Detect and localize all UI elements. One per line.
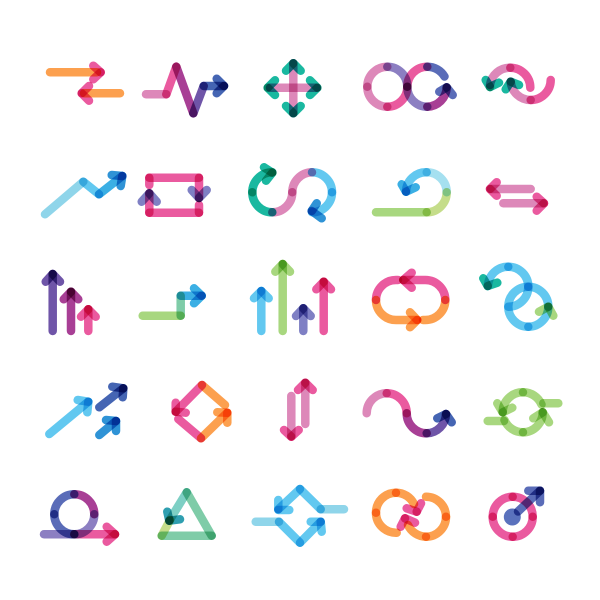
icon: swap arrows orange bbox=[50, 66, 120, 101]
icon: target arrow bbox=[493, 491, 540, 537]
icon: infinity loop arrow bbox=[367, 67, 453, 107]
icon: green sync arrows bbox=[488, 392, 558, 432]
icon: loop arrow bbox=[44, 494, 115, 542]
icon: triangle arrow bbox=[162, 492, 212, 536]
icon: pink swap arrows bbox=[490, 182, 544, 211]
icon: diamond split arrows bbox=[256, 489, 344, 543]
icon: diamond cycle arrows bbox=[176, 385, 227, 438]
icon: stadium cycle arrows bbox=[376, 273, 445, 327]
icon: three diagonal arrows bbox=[49, 387, 123, 435]
icon: pulse arrow bbox=[146, 67, 224, 113]
icon: interlocked wave arrows bbox=[486, 68, 551, 100]
icon: four up arrows bbox=[254, 264, 331, 331]
icon: rising trend arrow bbox=[45, 175, 122, 214]
icon: rectangle cycle arrows bbox=[142, 178, 207, 213]
icon: orange chain arrows bbox=[376, 493, 446, 537]
icon: wave arrow bbox=[367, 393, 452, 433]
icon: three descending up arrows bbox=[46, 274, 96, 331]
icon: linked circles arrows bbox=[483, 267, 553, 327]
icon: step arrow bbox=[143, 288, 202, 316]
icon: S curve arrows bbox=[252, 167, 332, 218]
icon: up and down arrows bbox=[284, 383, 313, 437]
icon: four-way move arrows bbox=[268, 63, 317, 113]
icon: return curve arrow bbox=[376, 172, 447, 212]
